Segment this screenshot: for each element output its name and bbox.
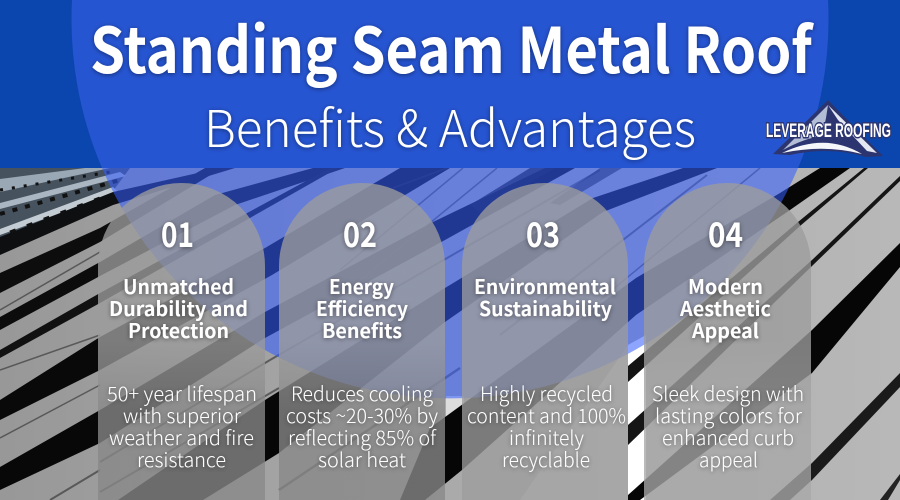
panel 4: aesthetic: Aesthetic [679,293,771,322]
panel 1: durability: Durability and [109,293,248,322]
panel 2: energy efficiency: Reduces cooling [291,378,433,407]
panel 2: energy efficiency [279,183,445,500]
panel 3: sustainability: Sustainability [479,293,613,322]
panel 3: sustainability [462,183,628,500]
panel 2: energy efficiency: Energy [329,271,394,300]
panel 1: durability: 50+ year lifespan [107,378,257,407]
panel 1: durability: Protection [128,315,229,344]
panel 1: durability [98,183,265,500]
roof photo background [0,168,900,500]
panel 4: aesthetic: 04 [708,208,743,257]
header band [0,0,900,168]
panel 4: aesthetic: Modern [688,271,763,300]
panel 4: aesthetic: Sleek design with [652,378,804,407]
panel 1: durability: weather and fire [109,422,254,451]
panel 4: aesthetic: appeal [699,444,758,473]
panel 1: durability: 01 [161,208,194,257]
subtitle: Benefits & Advantages [204,88,696,162]
panel 3: sustainability: 03 [526,208,560,257]
panel 2: energy efficiency: 02 [343,208,377,257]
logo: Leverage Roofing [766,100,891,157]
panel 4: aesthetic [644,183,811,500]
panel 1: durability: with superior [123,400,242,429]
panel 4: aesthetic: enhanced curb [662,422,794,451]
panel 1: durability: Unmatched [123,271,234,300]
panel 3: sustainability: infinitely [509,422,584,451]
panel 3: sustainability: recyclable [502,444,590,473]
panel 2: energy efficiency: Efficiency [316,293,408,322]
panel 4: aesthetic: lasting colors for [655,400,803,429]
panel 1: durability: resistance [137,444,226,473]
panel 2: energy efficiency: reflecting 85% of [288,422,437,451]
title: Standing Seam Metal Roof [90,1,814,92]
translucent blue circle over photo [102,168,798,398]
panel 2: energy efficiency: solar heat [318,444,406,473]
panel 4: aesthetic: Appeal [691,315,759,344]
panel 2: energy efficiency: costs ~20-30% by [286,400,438,429]
panel 3: sustainability: Highly recycled [480,378,613,407]
panel 3: sustainability: content and 100% [467,400,626,429]
panel 3: sustainability: Environmental [474,271,616,300]
panel 2: energy efficiency: Benefits [322,315,402,344]
